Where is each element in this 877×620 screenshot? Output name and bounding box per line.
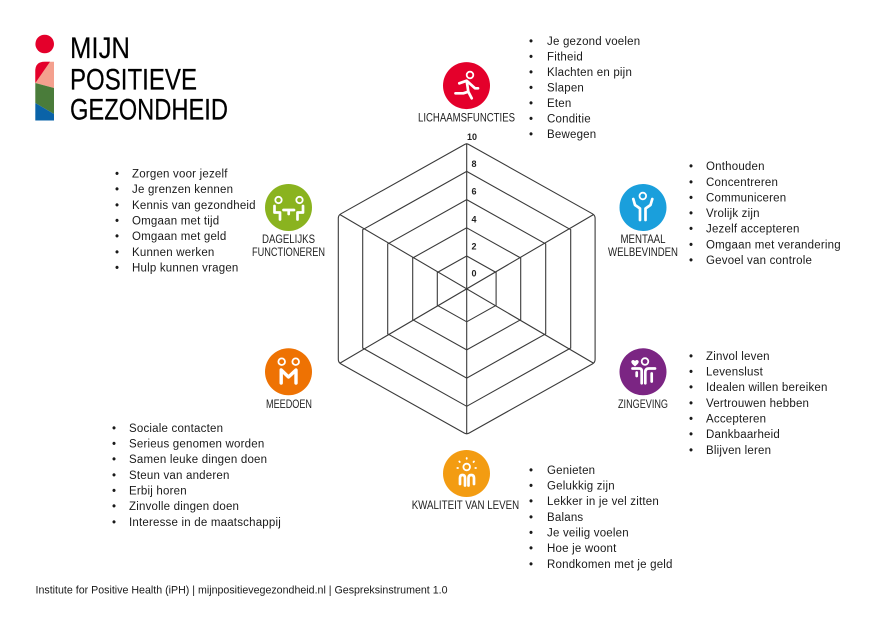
- list: Concentreren: [706, 177, 778, 189]
- list: Conditie: [547, 114, 591, 126]
- list: Zinvol leven: [706, 351, 770, 363]
- icon: two figures at a table: [265, 184, 312, 231]
- list: •: [689, 445, 693, 457]
- list: •: [529, 129, 533, 141]
- radar chart: [338, 132, 595, 434]
- list: Genieten: [547, 465, 595, 477]
- segment: kwaliteit van leven: [412, 450, 673, 571]
- list: Vertrouwen hebben: [706, 398, 809, 410]
- list: Hulp kunnen vragen: [132, 262, 239, 274]
- list: [689, 161, 841, 267]
- list: Vrolijk zijn: [706, 208, 760, 220]
- list: •: [689, 192, 693, 204]
- list: Lekker in je vel zitten: [547, 496, 659, 508]
- scale numbers: 4: [471, 214, 477, 224]
- list: Erbij horen: [129, 486, 187, 498]
- scale numbers: [467, 132, 477, 278]
- list: Fitheid: [547, 52, 583, 64]
- list: Steun van anderen: [129, 470, 230, 482]
- list: •: [112, 501, 116, 513]
- list: •: [529, 465, 533, 477]
- list: Serieus genomen worden: [129, 438, 264, 450]
- heading: DAGELIJKS: [262, 234, 315, 246]
- list: •: [112, 517, 116, 529]
- list: •: [529, 512, 533, 524]
- icon: raised arms figure: [620, 184, 666, 231]
- list: •: [529, 496, 533, 508]
- list: •: [115, 184, 119, 196]
- list: •: [689, 429, 693, 441]
- list: •: [112, 438, 116, 450]
- list: •: [112, 486, 116, 498]
- list: •: [112, 470, 116, 482]
- scale numbers: 6: [471, 186, 477, 196]
- list: Je grenzen kennen: [132, 184, 233, 196]
- list: •: [112, 454, 116, 466]
- list: Omgaan met tijd: [132, 216, 219, 228]
- list: Jezelf accepteren: [706, 224, 800, 236]
- list: Omgaan met verandering: [706, 240, 841, 252]
- list: •: [689, 398, 693, 410]
- list: •: [529, 67, 533, 79]
- list: •: [689, 382, 693, 394]
- list: Eten: [547, 98, 571, 110]
- list: [689, 351, 828, 457]
- list: Idealen willen bereiken: [706, 382, 828, 394]
- segment: lichaamsfuncties: [418, 36, 640, 141]
- list: Klachten en pijn: [547, 67, 632, 79]
- list: Onthouden: [706, 161, 765, 173]
- heading: ZINGEVING: [618, 399, 668, 411]
- list: Communiceren: [706, 192, 786, 204]
- list: Interesse in de maatschappij: [129, 517, 281, 529]
- list: •: [689, 161, 693, 173]
- scale numbers: 0: [471, 268, 477, 278]
- icon: running figure: [443, 62, 490, 109]
- scale numbers: 8: [471, 159, 477, 169]
- segment: dagelijks functioneren: [115, 168, 325, 274]
- scale numbers: 10: [467, 132, 477, 142]
- list: Zorgen voor jezelf: [132, 168, 228, 180]
- list: Kunnen werken: [132, 247, 215, 259]
- list: Gevoel van controle: [706, 255, 812, 267]
- segment: dagelijks functioneren: FUNCTIONEREN: [252, 247, 325, 259]
- heading: MENTAAL: [620, 234, 666, 246]
- logo wordmark: GEZONDHEID: [70, 94, 228, 126]
- segment: zingeving: [618, 348, 828, 457]
- list: Balans: [547, 512, 583, 524]
- segment: mentaal welbevinden: WELBEVINDEN: [608, 247, 678, 259]
- icon: two figures forming M: [265, 348, 312, 395]
- heading: LICHAAMSFUNCTIES: [418, 112, 515, 124]
- list: •: [529, 82, 533, 94]
- list: •: [115, 216, 119, 228]
- list: Gelukkig zijn: [547, 480, 615, 492]
- list: Samen leuke dingen doen: [129, 454, 267, 466]
- list: Hoe je woont: [547, 543, 617, 555]
- logo mark: [35, 35, 54, 121]
- list: •: [529, 559, 533, 571]
- list: Zinvolle dingen doen: [129, 501, 239, 513]
- list: [112, 423, 281, 529]
- list: •: [115, 247, 119, 259]
- list: [115, 168, 256, 274]
- list: Dankbaarheid: [706, 429, 780, 441]
- list: •: [689, 208, 693, 220]
- list: •: [689, 240, 693, 252]
- list: •: [689, 351, 693, 363]
- list: •: [115, 262, 119, 274]
- list: •: [529, 52, 533, 64]
- list: Kennis van gezondheid: [132, 200, 256, 212]
- list: Bewegen: [547, 129, 596, 141]
- list: Accepteren: [706, 414, 766, 426]
- list: •: [529, 98, 533, 110]
- icon: figures with sun: [443, 450, 490, 497]
- list: •: [529, 543, 533, 555]
- list: Blijven leren: [706, 445, 771, 457]
- list: •: [689, 177, 693, 189]
- list: Levenslust: [706, 366, 764, 378]
- list: •: [115, 168, 119, 180]
- list: Rondkomen met je geld: [547, 559, 673, 571]
- list: [529, 36, 640, 141]
- logo: [35, 32, 228, 126]
- list: [529, 465, 673, 571]
- list: Sociale contacten: [129, 423, 223, 435]
- list: •: [689, 414, 693, 426]
- list: •: [115, 231, 119, 243]
- segment: mentaal welbevinden: [608, 161, 841, 267]
- heading: KWALITEIT VAN LEVEN: [412, 500, 519, 512]
- icon: figure with heart: [620, 348, 666, 395]
- list: •: [112, 423, 116, 435]
- list: •: [115, 200, 119, 212]
- list: Omgaan met geld: [132, 231, 226, 243]
- list: Je gezond voelen: [547, 36, 640, 48]
- list: •: [689, 224, 693, 236]
- list: •: [529, 114, 533, 126]
- list: •: [529, 528, 533, 540]
- heading: MEEDOEN: [266, 399, 312, 411]
- list: •: [689, 366, 693, 378]
- scale numbers: 2: [471, 242, 477, 252]
- logo wordmark: MIJN: [70, 32, 130, 65]
- logo wordmark: [70, 32, 228, 126]
- footer: Institute for Positive Health (iPH) | mijnpositievegezondheid.nl | Gespreksinstrument 1.0: [36, 584, 448, 596]
- list: •: [529, 480, 533, 492]
- list: Je veilig voelen: [547, 528, 629, 540]
- list: Slapen: [547, 82, 584, 94]
- list: •: [689, 255, 693, 267]
- list: •: [529, 36, 533, 48]
- segment: meedoen: [112, 348, 312, 529]
- logo wordmark: POSITIEVE: [70, 64, 197, 96]
